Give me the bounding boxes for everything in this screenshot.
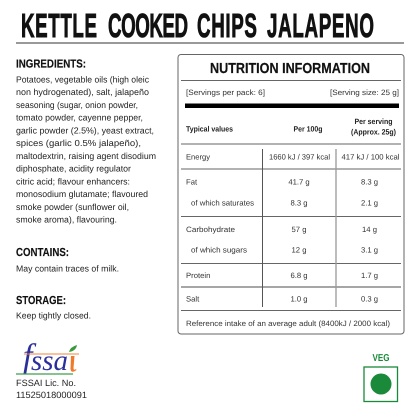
row: fat [186,178,378,186]
panel: contains: May contain traces of milk. [16,264,119,274]
title: COOKED [108,8,188,45]
text block: ingredient list: tomato powder, cayenne pepper, [16,112,143,122]
text block: ingredient list: spices (garlic 0.5% jalapeño), [16,138,141,148]
panel: storage: STORAGE: [16,294,66,307]
text block: ingredient list: non hydrogenated), salt, jalapeño [16,87,149,97]
text block: ingredient list: monosodium glutamate; flavoured [16,189,148,199]
servings row: [Servings per pack: 6] [186,88,265,97]
servings row [186,88,399,97]
text block: ingredient list: garlic powder (2.5%), yeast extract, [16,126,154,136]
row: energy: Energy [186,152,210,162]
reference intake note: Reference intake of an average adult (8400kJ / 2000 kcal) [186,319,390,328]
text block: fssai licence: FSSAI Lic. No. [16,378,76,388]
row: carbohydrate: Carbohydrate [186,225,235,234]
heading: nutrition information: NUTRITION INFORMATION [210,61,370,77]
table header: Per 100g [294,124,323,134]
row: fat: Fat [186,178,198,186]
row: salt: 0.3 g [361,294,378,304]
row: carbohydrate: 57 g [292,225,306,234]
row: protein: 1.7 g [361,271,378,280]
icon: fssai logo: f [23,338,37,375]
title: CHIPS [197,8,257,45]
panel: contains: CONTAINS: [16,246,69,259]
panel: nutrition information [178,54,404,334]
icon: fssai logo [16,338,79,377]
text block: fssai licence [16,378,87,400]
panel: contains [16,246,119,274]
row: protein: Protein [186,271,210,280]
row: salt: Salt [186,294,200,304]
panel: storage: Keep tightly closed. [16,310,91,320]
title [16,8,404,45]
row: carbohydrate: 14 g [362,225,377,234]
row: salt [186,294,378,304]
text block: ingredient list [16,74,156,224]
row: protein [186,271,378,280]
text block: ingredient list: smoke powder (sunflower oil, [16,202,129,212]
row: fat: 41.7 g [288,178,310,186]
text block: ingredient list: Potatoes, vegetable oils (high oleic [16,74,150,84]
table header: Per serving [354,117,393,126]
row: saturates: 8.3 g [290,198,308,208]
row: carbohydrate [186,225,377,234]
table header: (Approx. 25g) [351,128,396,136]
row: salt: 1.0 g [290,294,308,304]
icon: veg mark: VEG [372,353,390,364]
icon: veg mark [364,353,398,402]
row: energy: 1660 kJ / 397 kcal [269,152,330,162]
table header: Typical values [186,124,233,134]
text block: ingredient list: smoke aroma), flavouring. [16,214,117,224]
text block: ingredient list: citric acid; flavour enhancers: [16,176,130,186]
panel: storage [16,294,91,320]
table grid [181,144,401,310]
table header [186,117,396,136]
row: fat: 8.3 g [361,178,378,186]
title: JALAPENO [267,8,374,45]
icon: fssai logo: ssa [31,345,68,377]
row: protein: 6.8 g [290,271,308,280]
servings row: [Serving size: 25 g] [330,88,399,97]
row: energy [186,152,400,162]
text block: ingredient list: maltodextrin, raising agent disodium [16,151,156,161]
row: sugars [191,246,378,254]
row: sugars: 3.1 g [361,246,378,254]
title: KETTLE [21,8,97,45]
row: saturates: 2.1 g [361,198,378,208]
row: sugars: 12 g [292,246,306,254]
text block: ingredient list: seasoning (sugar, onion powder, [16,100,138,110]
text block: fssai licence: 11525018000091 [16,390,87,400]
row: saturates: of which saturates [191,198,254,208]
heading: ingredients: INGREDIENTS: [16,58,86,70]
text block: ingredient list: diphosphate, acidity regulator [16,164,131,174]
row: sugars: of which sugars [191,246,247,254]
row: saturates [191,198,378,208]
row: energy: 417 kJ / 100 kcal [342,152,400,162]
panel: ingredients [16,58,156,224]
